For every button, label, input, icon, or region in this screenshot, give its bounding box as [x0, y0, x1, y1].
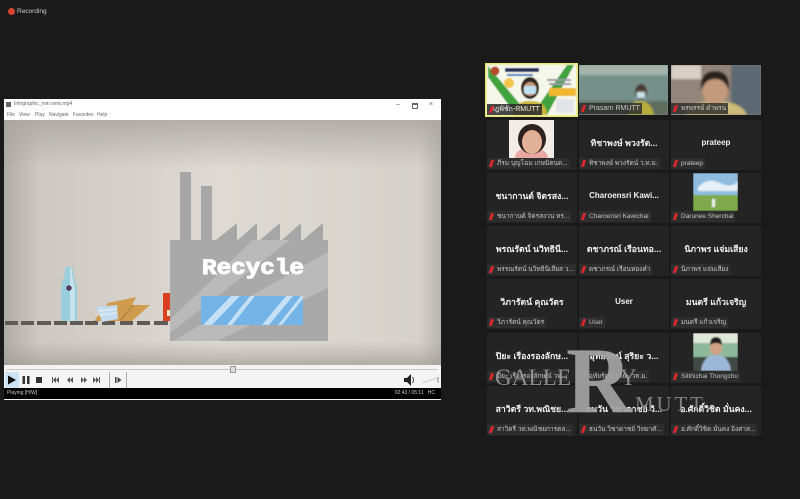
tile: Thai name 8: มนตรี แก้วเจริญ [681, 319, 726, 326]
tile: Thai name 9 [487, 333, 577, 383]
tile: Thai name 6: นิภาพร แจ่มเสียง [684, 244, 748, 254]
tile: prateep [671, 120, 761, 170]
menu bar: Navigate [49, 112, 69, 118]
panel: media player window [4, 99, 441, 400]
menu bar: Help [97, 112, 107, 118]
tile: Thai name 3: ชนากานต์ จิตรสง... [495, 191, 569, 201]
icon: cardboard and face mask [94, 297, 150, 322]
tile: Thai name 9: ปิยะ เรืองรองลักษ... [496, 351, 568, 361]
tile: Thai name 2: ทิชาพงษ์ พวงรัตน์ ว.ท.ม. [589, 160, 658, 167]
icon: water bottle [61, 267, 77, 321]
video frame: recycle animation [4, 120, 441, 365]
tile: Thai name 7 [487, 279, 577, 329]
tile: Thai name 3: ชนากานต์ จิตรสงวน ทร... [497, 213, 569, 220]
tile: Thai name 5: ดชาภรณ์ เรือนทอ... [587, 244, 661, 254]
participant label [671, 103, 728, 114]
blue progress bar [201, 296, 305, 325]
tile: Thai name 8: มนตรี แก้วเจริญ [686, 297, 746, 307]
status bar [4, 388, 441, 399]
tile: Thai name 6: นิภาพร แจ่มเสียง [681, 266, 728, 273]
tile: woman at desk [671, 65, 761, 115]
participant label [487, 158, 570, 169]
tile: Thai name 10: อุทัยรัตน์ สุริยะ วท.ม. [589, 373, 647, 380]
tile: Thai name 10 [579, 333, 669, 383]
speaker name [487, 104, 542, 115]
tile: Thai name 11: สาวิตรี วท.พณิชย... [496, 404, 568, 414]
tile: Thai name 7: วิภารัตน์ คุณวัตร [500, 297, 564, 307]
watermark: Gallery RMUTT: GALLE [495, 365, 571, 390]
tile: Charoensri [579, 173, 669, 223]
status bar: Playing [H/W] [7, 390, 37, 396]
menu bar: Favorites [73, 112, 94, 118]
tile: Darunee: Darunee Sherchai [681, 213, 733, 220]
tile: active speaker with infographic background [485, 63, 578, 117]
factory building [170, 172, 328, 341]
tile: Thai name 13: อ.ศักดิ์วิชิต มั่นคง อิงศาส... [681, 426, 755, 433]
icon: red can [163, 293, 171, 321]
man portrait photo [693, 333, 738, 371]
tile: Thai name 10: อุทัยรัตน์ สุริยะ ว... [590, 351, 658, 361]
speaker name: ภฎพิชัก-RMUTT [490, 106, 540, 113]
tile: User [579, 279, 669, 329]
tile: Sitthichai [671, 333, 761, 383]
tile: Thai name 12: ธนวัน วิชาดาชย์ วิ... [586, 404, 662, 414]
title bar: × [429, 101, 433, 108]
tile: Darunee [671, 173, 761, 223]
title bar: – [396, 101, 400, 108]
factory label: Recycle [202, 256, 304, 281]
tile: Thai name 4 [487, 226, 577, 276]
tile: Thai name 11: สาวิตรี วท.พณิชยการตล... [497, 426, 571, 433]
title bar: Infographic_mm.wmv.mp4 [14, 101, 72, 107]
tile: Thai name 8 [671, 279, 761, 329]
participant label: Prasarn RMUTT [589, 105, 640, 112]
portrait photo [509, 120, 554, 158]
participant label: ภีรม บุญโฉม เกษมิตนต... [497, 160, 568, 167]
menu bar: View [19, 112, 30, 118]
tile: Thai name 13: อ.ศักดิ์วิชิต มั่นคง... [680, 404, 752, 414]
tile: Charoensri: Charoensri Kawichai [589, 213, 649, 220]
watermark: Gallery RMUTT [495, 340, 703, 420]
tile: woman portrait [487, 120, 577, 170]
tile: Thai name 11 [487, 386, 577, 436]
menu bar: Play [35, 112, 45, 118]
watermark: Gallery RMUTT: Y [620, 365, 637, 390]
tile: Thai name 13 [671, 386, 761, 436]
tile: prateep: prateep [681, 160, 703, 167]
recording indicator: Recording [17, 8, 47, 15]
landscape photo [693, 173, 738, 211]
tile: Thai name 5 [579, 226, 669, 276]
tile: Sitthichai: Sitthichai Thongchu [681, 373, 738, 380]
participant label [579, 103, 642, 114]
tile: Thai name 3 [487, 173, 577, 223]
tile: prateep: prateep [702, 138, 730, 147]
panel: participant gallery [485, 63, 761, 436]
tile: User: User [589, 319, 603, 326]
participant label: พรพรรษ์ ดำพรน [681, 105, 726, 112]
tile: Thai name 12 [579, 386, 669, 436]
watermark: Gallery RMUTT: MUTT [635, 392, 703, 416]
tile: Thai name 9: ปิยะ เรืองรองลักษณ์ วท... [497, 373, 567, 380]
tile: Thai name 12: ธนวัน วิชาดาชย์ วิทยาศั... [589, 426, 662, 433]
conveyor belt [5, 321, 168, 325]
tile: Thai name 5: ดชาภรณ์ เรือนทองคำ [589, 266, 650, 273]
tile: Thai name 2 [579, 120, 669, 170]
playback controls [4, 365, 441, 388]
menu bar [4, 110, 441, 120]
tile: Thai name 4: พรรณรัตน์ นวิทธินิเสียส ว... [497, 266, 574, 273]
tile: Thai name 7: วิภารัตน์ คุณวัตร [497, 319, 544, 326]
status bar: 02:43 / 05:11 HC [395, 390, 435, 396]
tile: Thai name 4: พรณรัตน์ นวิทธินี... [496, 244, 568, 254]
tile: Charoensri: Charoensri Kawi... [589, 191, 659, 200]
tile: Prasarn RMUTT [579, 65, 668, 115]
tile: User: User [615, 297, 633, 306]
tile: Thai name 6 [671, 226, 761, 276]
menu bar: File [7, 112, 15, 118]
tile: Thai name 2: ทิชาพงษ์ พวงรัต... [590, 138, 658, 148]
title bar [4, 99, 441, 110]
